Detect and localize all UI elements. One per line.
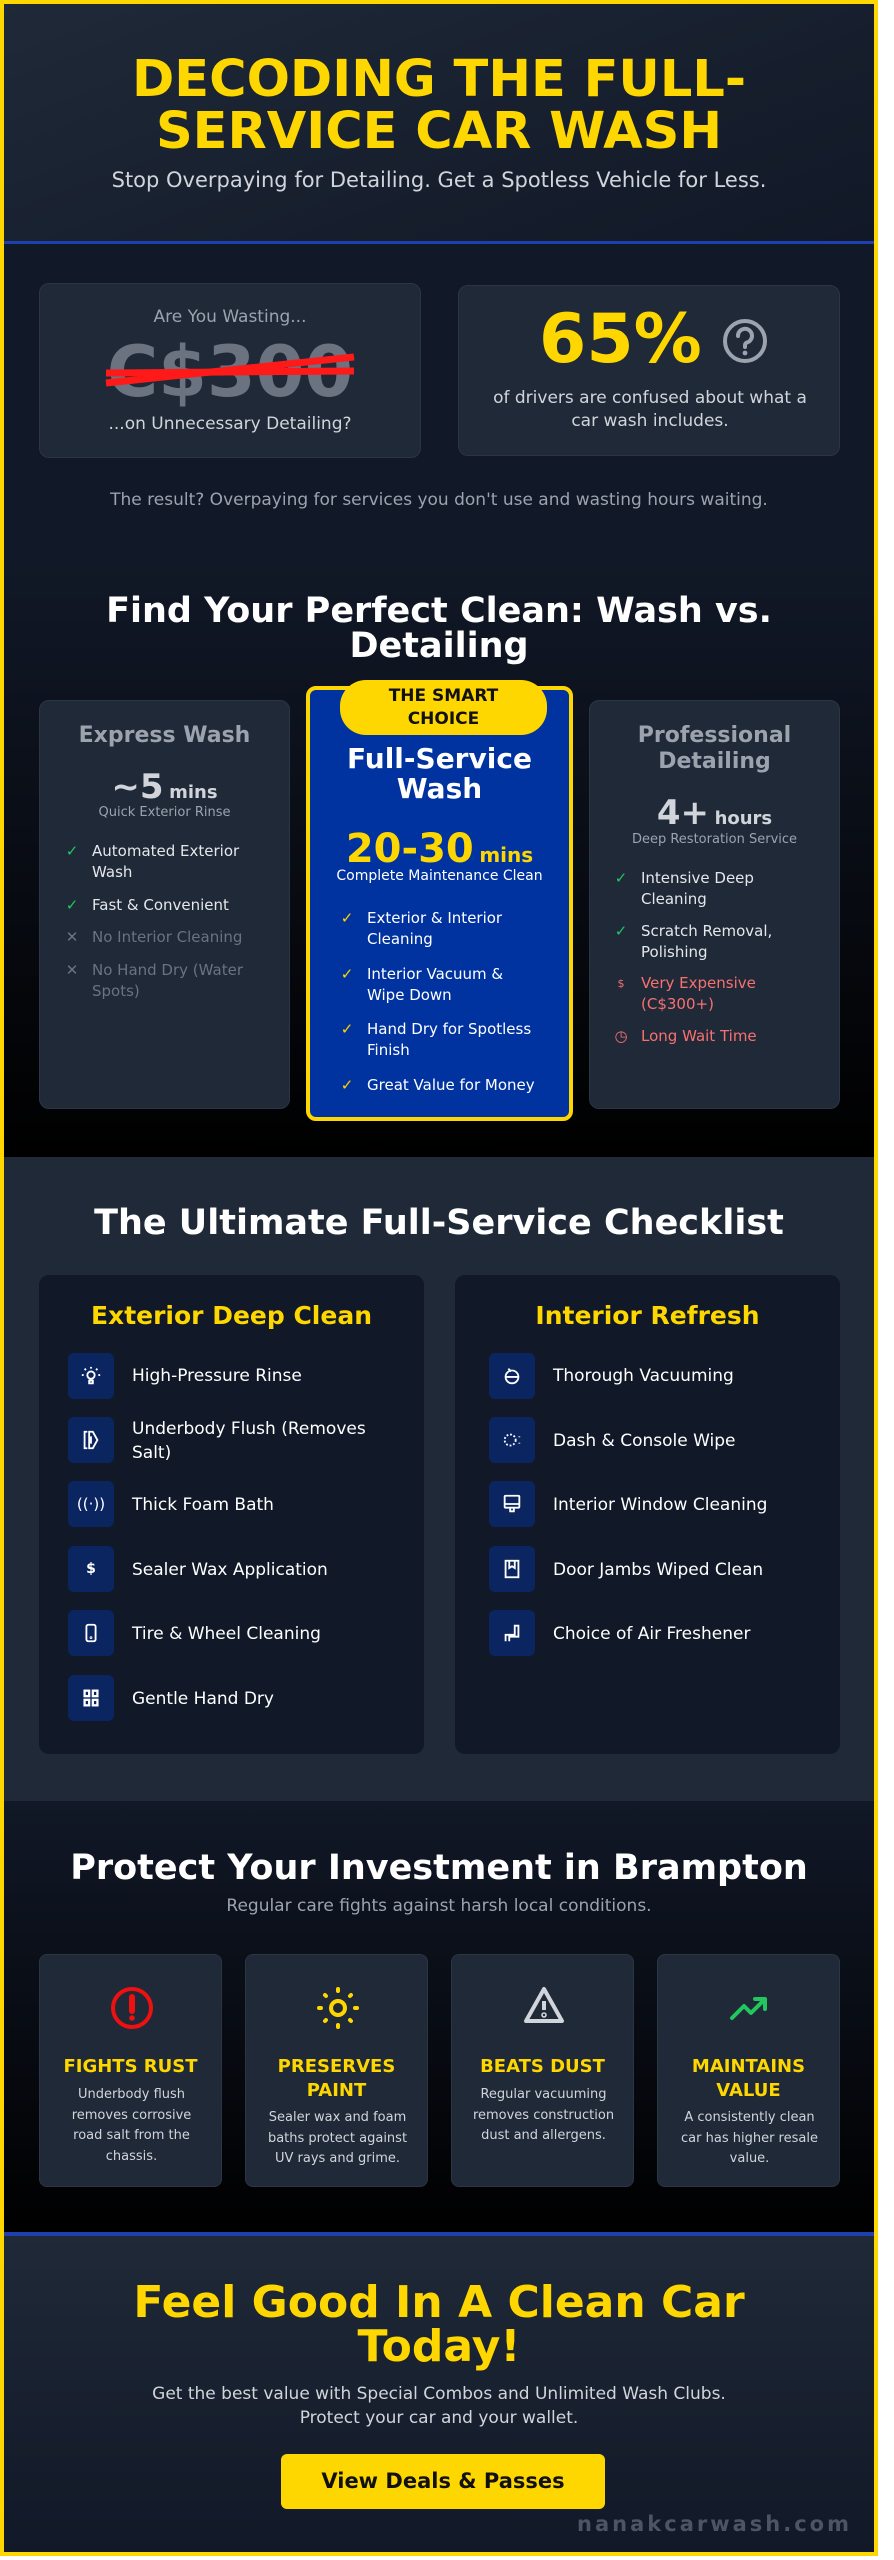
card: 65% confused: 65% bbox=[539, 300, 702, 379]
comparison heading bbox=[106, 591, 772, 666]
card: professional detailing: ✓ bbox=[615, 922, 627, 940]
icon: question bbox=[723, 319, 767, 363]
CTA section bbox=[4, 2236, 874, 2556]
card: express wash: Quick Exterior Rinse bbox=[99, 805, 230, 820]
card: professional detailing: ✓ bbox=[615, 869, 627, 887]
comparison heading: Detailing bbox=[349, 626, 529, 666]
checklist section bbox=[4, 1157, 874, 1801]
card: express wash: No Interior Cleaning bbox=[92, 928, 242, 946]
footer url: nanakcarwash.com bbox=[577, 2512, 852, 2536]
card: express wash: Automated Exterior Wash bbox=[92, 842, 239, 881]
card: express wash bbox=[39, 700, 290, 1109]
card: professional detailing: Intensive Deep Cleaning bbox=[641, 869, 754, 908]
card: professional detailing bbox=[589, 700, 840, 1109]
card: preserves paint bbox=[245, 1954, 428, 2187]
card: professional detailing: Detailing bbox=[658, 749, 771, 774]
card: beats dust: BEATS DUST bbox=[480, 2056, 605, 2077]
card: professional detailing: 4+ hours bbox=[657, 793, 772, 833]
exterior items: $ bbox=[86, 1561, 96, 1577]
card: professional detailing: ◷ bbox=[614, 1027, 628, 1045]
card: express wash: ✓ bbox=[66, 842, 78, 860]
comparison section bbox=[4, 564, 874, 1157]
card: maintains value: MAINTAINS bbox=[692, 2056, 805, 2077]
card: express wash: Express Wash bbox=[79, 723, 250, 748]
title: DECODING THE FULL- bbox=[132, 50, 746, 109]
interior items: Interior Window Cleaning bbox=[553, 1495, 767, 1515]
card: 65% confused: of drivers are confused about what a car wash includes. bbox=[493, 388, 807, 431]
panel: exterior deep clean: Exterior Deep Clean bbox=[91, 1301, 372, 1330]
card: professional detailing: Long Wait Time bbox=[641, 1027, 757, 1045]
card: preserves paint: PRESERVES bbox=[278, 2056, 395, 2077]
card: fights rust: Underbody flush removes corrosive road salt from the chassis. bbox=[72, 2087, 191, 2164]
card: full-service wash (highlighted): ✓ bbox=[341, 965, 353, 983]
interior items bbox=[489, 1353, 767, 1656]
card: full-service wash (highlighted): Full-Service bbox=[347, 742, 532, 775]
panel: interior refresh: Interior Refresh bbox=[535, 1301, 760, 1330]
card: full-service wash (highlighted) bbox=[306, 686, 573, 1121]
card: wasting C$300: Are You Wasting... bbox=[154, 307, 306, 327]
card: wasting C$300 bbox=[39, 283, 421, 458]
exterior items: Underbody Flush (Removes Salt) bbox=[132, 1419, 366, 1463]
card: full-service wash (highlighted): Wash bbox=[397, 772, 482, 805]
card: full-service wash (highlighted): ✓ bbox=[341, 1076, 353, 1094]
comparison heading: Find Your Perfect Clean: Wash vs. bbox=[106, 591, 772, 631]
exterior items: ((·)) bbox=[77, 1495, 105, 1513]
CTA button bbox=[281, 2454, 605, 2509]
card: full-service wash (highlighted): Complete Maintenance Clean bbox=[336, 868, 543, 884]
card: full-service wash (highlighted): Interior Vacuum & Wipe Down bbox=[367, 965, 503, 1004]
CTA heading bbox=[133, 2277, 745, 2372]
card: 65% confused bbox=[458, 285, 840, 456]
card: full-service wash (highlighted): ✓ bbox=[341, 909, 353, 927]
CTA heading: Feel Good In A Clean Car bbox=[133, 2277, 745, 2328]
exterior items: High-Pressure Rinse bbox=[132, 1366, 302, 1386]
card: maintains value bbox=[657, 1954, 840, 2187]
title bbox=[132, 50, 746, 161]
card: express wash: ✕ bbox=[66, 928, 78, 946]
card: preserves paint: PAINT bbox=[307, 2080, 366, 2101]
card: wasting C$300: ...on Unnecessary Detailing? bbox=[108, 414, 352, 434]
interior items: Dash & Console Wipe bbox=[553, 1431, 736, 1451]
card: preserves paint: Sealer wax and foam baths protect against UV rays and grime. bbox=[268, 2110, 407, 2166]
badge: the smart choice: CHOICE bbox=[408, 709, 479, 729]
CTA text bbox=[152, 2384, 726, 2428]
card: full-service wash (highlighted): 20-30 mins bbox=[346, 826, 533, 872]
title: SERVICE CAR WASH bbox=[156, 102, 722, 161]
exterior items: Tire & Wheel Cleaning bbox=[132, 1624, 321, 1644]
badge: the smart choice bbox=[340, 680, 547, 735]
card: maintains value: VALUE bbox=[716, 2080, 781, 2101]
card: fights rust bbox=[39, 1954, 222, 2187]
protect subtitle: Regular care fights against harsh local conditions. bbox=[226, 1896, 652, 1916]
card: full-service wash (highlighted): Great Value for Money bbox=[367, 1076, 535, 1094]
card: fights rust: FIGHTS RUST bbox=[63, 2056, 198, 2077]
card: professional detailing: Scratch Removal, Polishing bbox=[641, 922, 772, 961]
panel: interior refresh bbox=[455, 1275, 840, 1754]
badge: the smart choice: THE SMART bbox=[389, 686, 498, 706]
card: full-service wash (highlighted): ✓ bbox=[341, 1020, 353, 1038]
card: express wash: Fast & Convenient bbox=[92, 896, 229, 914]
exterior items: Thick Foam Bath bbox=[132, 1495, 274, 1515]
card: professional detailing: $ bbox=[618, 977, 624, 990]
exterior items bbox=[68, 1353, 366, 1721]
card: maintains value: A consistently clean car has higher resale value. bbox=[681, 2110, 818, 2166]
subtitle: Stop Overpaying for Detailing. Get a Spotless Vehicle for Less. bbox=[112, 168, 766, 192]
card: beats dust: Regular vacuuming removes construction dust and allergens. bbox=[473, 2087, 614, 2143]
protect section bbox=[4, 1801, 874, 2232]
stats section bbox=[4, 244, 874, 564]
checklist heading: The Ultimate Full-Service Checklist bbox=[94, 1203, 784, 1243]
interior items: Thorough Vacuuming bbox=[553, 1366, 734, 1386]
interior items: Choice of Air Freshener bbox=[553, 1624, 750, 1644]
CTA button: View Deals & Passes bbox=[321, 2469, 565, 2493]
card: express wash: ✓ bbox=[66, 896, 78, 914]
card: full-service wash (highlighted): Hand Dry for Spotless Finish bbox=[367, 1020, 531, 1059]
CTA text: Protect your car and your wallet. bbox=[300, 2408, 578, 2428]
card: full-service wash (highlighted): Exterior & Interior Cleaning bbox=[367, 909, 502, 948]
card: professional detailing: Very Expensive (C$300+) bbox=[641, 974, 756, 1013]
protect heading: Protect Your Investment in Brampton bbox=[70, 1848, 808, 1888]
exterior items: Gentle Hand Dry bbox=[132, 1689, 274, 1709]
crossed out price: C$300 bbox=[107, 331, 353, 413]
exterior items: Sealer Wax Application bbox=[132, 1560, 328, 1580]
card: beats dust bbox=[451, 1954, 634, 2187]
interior items: Door Jambs Wiped Clean bbox=[553, 1560, 763, 1580]
card: express wash: No Hand Dry (Water Spots) bbox=[92, 961, 243, 1000]
CTA text: Get the best value with Special Combos and Unlimited Wash Clubs. bbox=[152, 2384, 726, 2404]
card: express wash: ~5 mins bbox=[111, 767, 218, 807]
card: professional detailing: Professional bbox=[638, 723, 791, 748]
CTA heading: Today! bbox=[358, 2321, 520, 2372]
result text: The result? Overpaying for services you don't use and wasting hours waiting. bbox=[110, 490, 768, 510]
card: express wash: ✕ bbox=[66, 961, 78, 979]
header section bbox=[4, 4, 874, 241]
panel: exterior deep clean bbox=[39, 1275, 424, 1754]
card: professional detailing: Deep Restoration Service bbox=[632, 832, 797, 847]
